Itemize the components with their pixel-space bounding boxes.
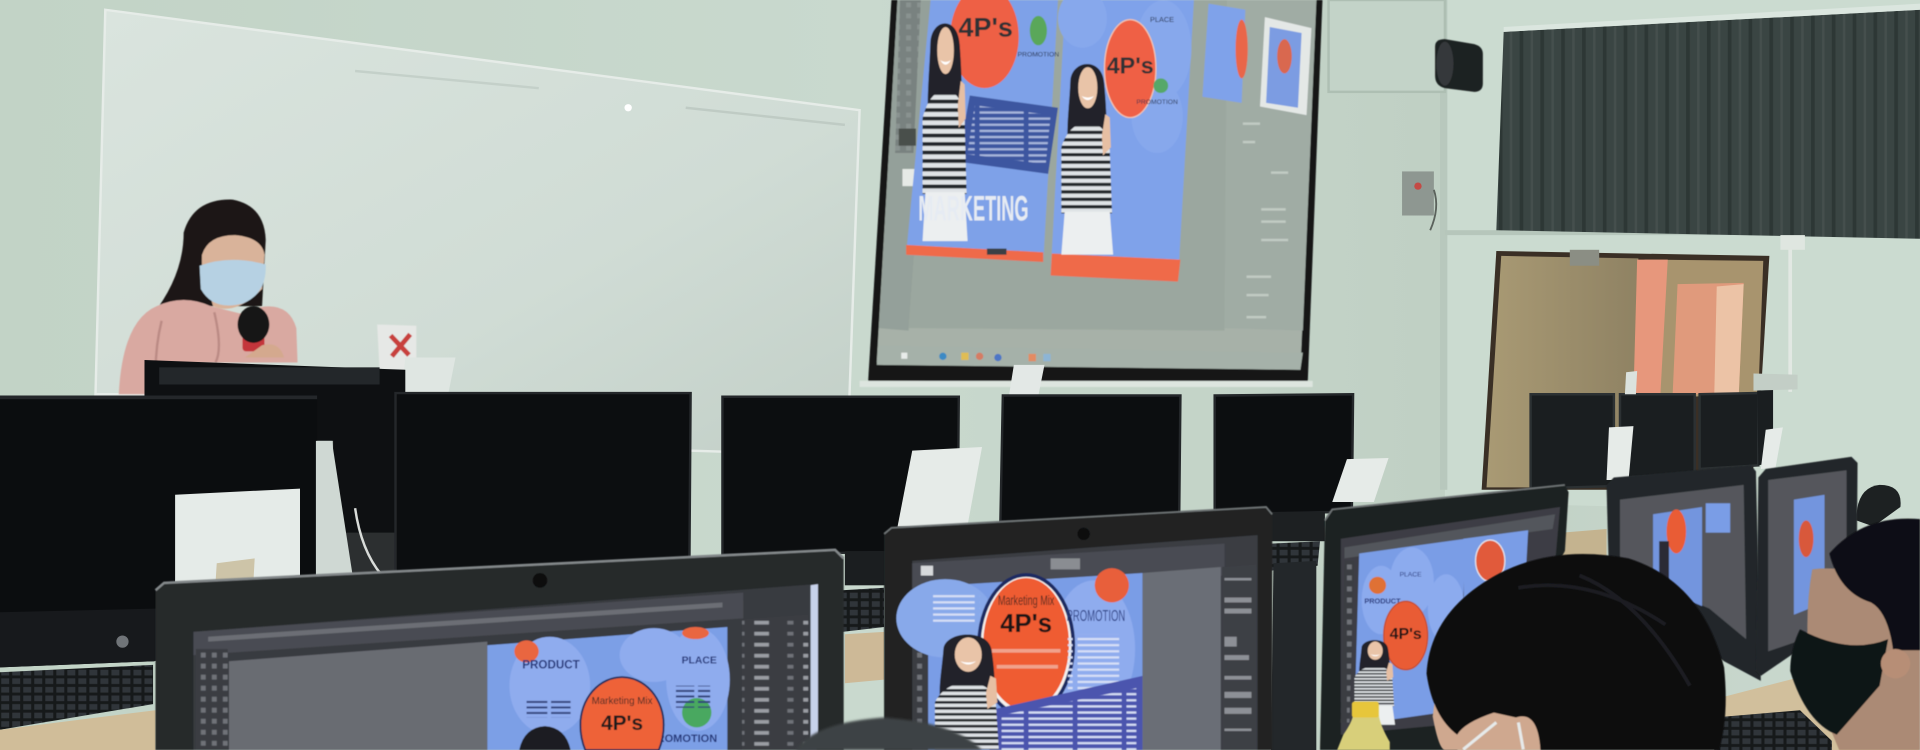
monitor 4 (1000, 396, 1180, 522)
4P's text on poster 2: 4P's (1107, 52, 1154, 78)
wall switch box (1402, 171, 1436, 230)
student head blurred bottom (796, 718, 982, 750)
paper notes on monitors (175, 371, 1798, 585)
monitor 3 (722, 397, 959, 632)
indigo text block (989, 676, 1142, 750)
red X sign on stand (377, 324, 416, 370)
front monitor 1 (156, 550, 844, 750)
thumbnails (1202, 4, 1311, 115)
black mask (1790, 629, 1888, 735)
hair (152, 200, 266, 316)
rear monitors row (0, 360, 1901, 730)
app right panel (1222, 564, 1256, 750)
presenter (119, 200, 298, 394)
wall speaker (1435, 39, 1483, 92)
sale badge (1095, 568, 1129, 602)
student right foreground (1790, 519, 1920, 750)
face (1807, 568, 1920, 750)
woman photo (935, 635, 999, 749)
app window (1341, 507, 1560, 735)
blouse (119, 300, 298, 394)
app canvas (229, 642, 487, 750)
screen right panel controls (1243, 122, 1288, 318)
poster (896, 568, 1142, 750)
MARKETING word on screen: MARKETING (918, 188, 1029, 228)
label PLACE: PLACE (1400, 572, 1422, 579)
webcam (533, 573, 547, 588)
screen poster 2 (1051, 0, 1194, 282)
paper note below screen (1009, 365, 1044, 396)
front monitor 2 (884, 507, 1272, 750)
taskbar (877, 345, 1303, 370)
face and neck (202, 235, 264, 309)
4P's text on screen: 4P's (959, 13, 1013, 43)
lectern monitor (144, 360, 405, 576)
microphone (238, 306, 284, 358)
front monitor 4 (1607, 465, 1761, 681)
layers panel (742, 615, 808, 750)
label PROMOTION: PROMOTION (1067, 608, 1125, 625)
black hair (1427, 554, 1726, 750)
label PLACE: PLACE (682, 656, 717, 667)
hair (1829, 519, 1920, 650)
projector screen (860, 0, 1322, 387)
4P's circle: 4P's (1390, 626, 1422, 643)
poster (1354, 530, 1528, 725)
front monitor 5 (1756, 457, 1858, 676)
heading 4P's: 4P's (1000, 610, 1052, 638)
front monitor 3 (1320, 485, 1569, 750)
app canvas (1142, 567, 1221, 750)
orange 4P's circle (580, 677, 664, 750)
label PRODUCT: PRODUCT (1364, 597, 1401, 606)
poster (487, 627, 730, 750)
window blinds (1496, 4, 1920, 239)
app window (912, 535, 1258, 750)
monitor 5 (1215, 394, 1353, 571)
label PRODUCT: PRODUCT (522, 659, 580, 672)
keyboard 1 (0, 665, 153, 730)
4P's circle (977, 573, 1075, 718)
label PROMOTION: PROMOTION (649, 733, 717, 745)
screen poster 2: PLACE (1150, 15, 1174, 24)
app window (193, 584, 817, 750)
screen poster 2: PROMOTION (1136, 99, 1178, 106)
desk surfaces (0, 529, 1920, 750)
orange 4P's circle: 4P's (601, 712, 643, 735)
orange 4P's circle: Marketing Mix (592, 696, 653, 707)
monitor 2 (396, 393, 691, 573)
far right monitors (1531, 389, 1901, 527)
plastic bottle (1337, 702, 1390, 750)
ear and mask strap (1433, 698, 1543, 750)
screen toolbar icons (895, 0, 921, 186)
wall conduit (1789, 239, 1792, 392)
face mask (200, 260, 266, 306)
right wall section with blinds and door (1329, 0, 1920, 514)
heading Marketing Mix: Marketing Mix (998, 593, 1054, 608)
4P's circle (1384, 601, 1428, 670)
whiteboard (96, 10, 860, 456)
webcam (1078, 528, 1090, 540)
student head foreground (1427, 554, 1726, 750)
screen poster 1 (906, 0, 1059, 262)
monitor 1 (0, 396, 317, 667)
screen poster 1: PROMOTION (1018, 51, 1059, 58)
door (1482, 250, 1769, 490)
woman head (519, 726, 571, 750)
